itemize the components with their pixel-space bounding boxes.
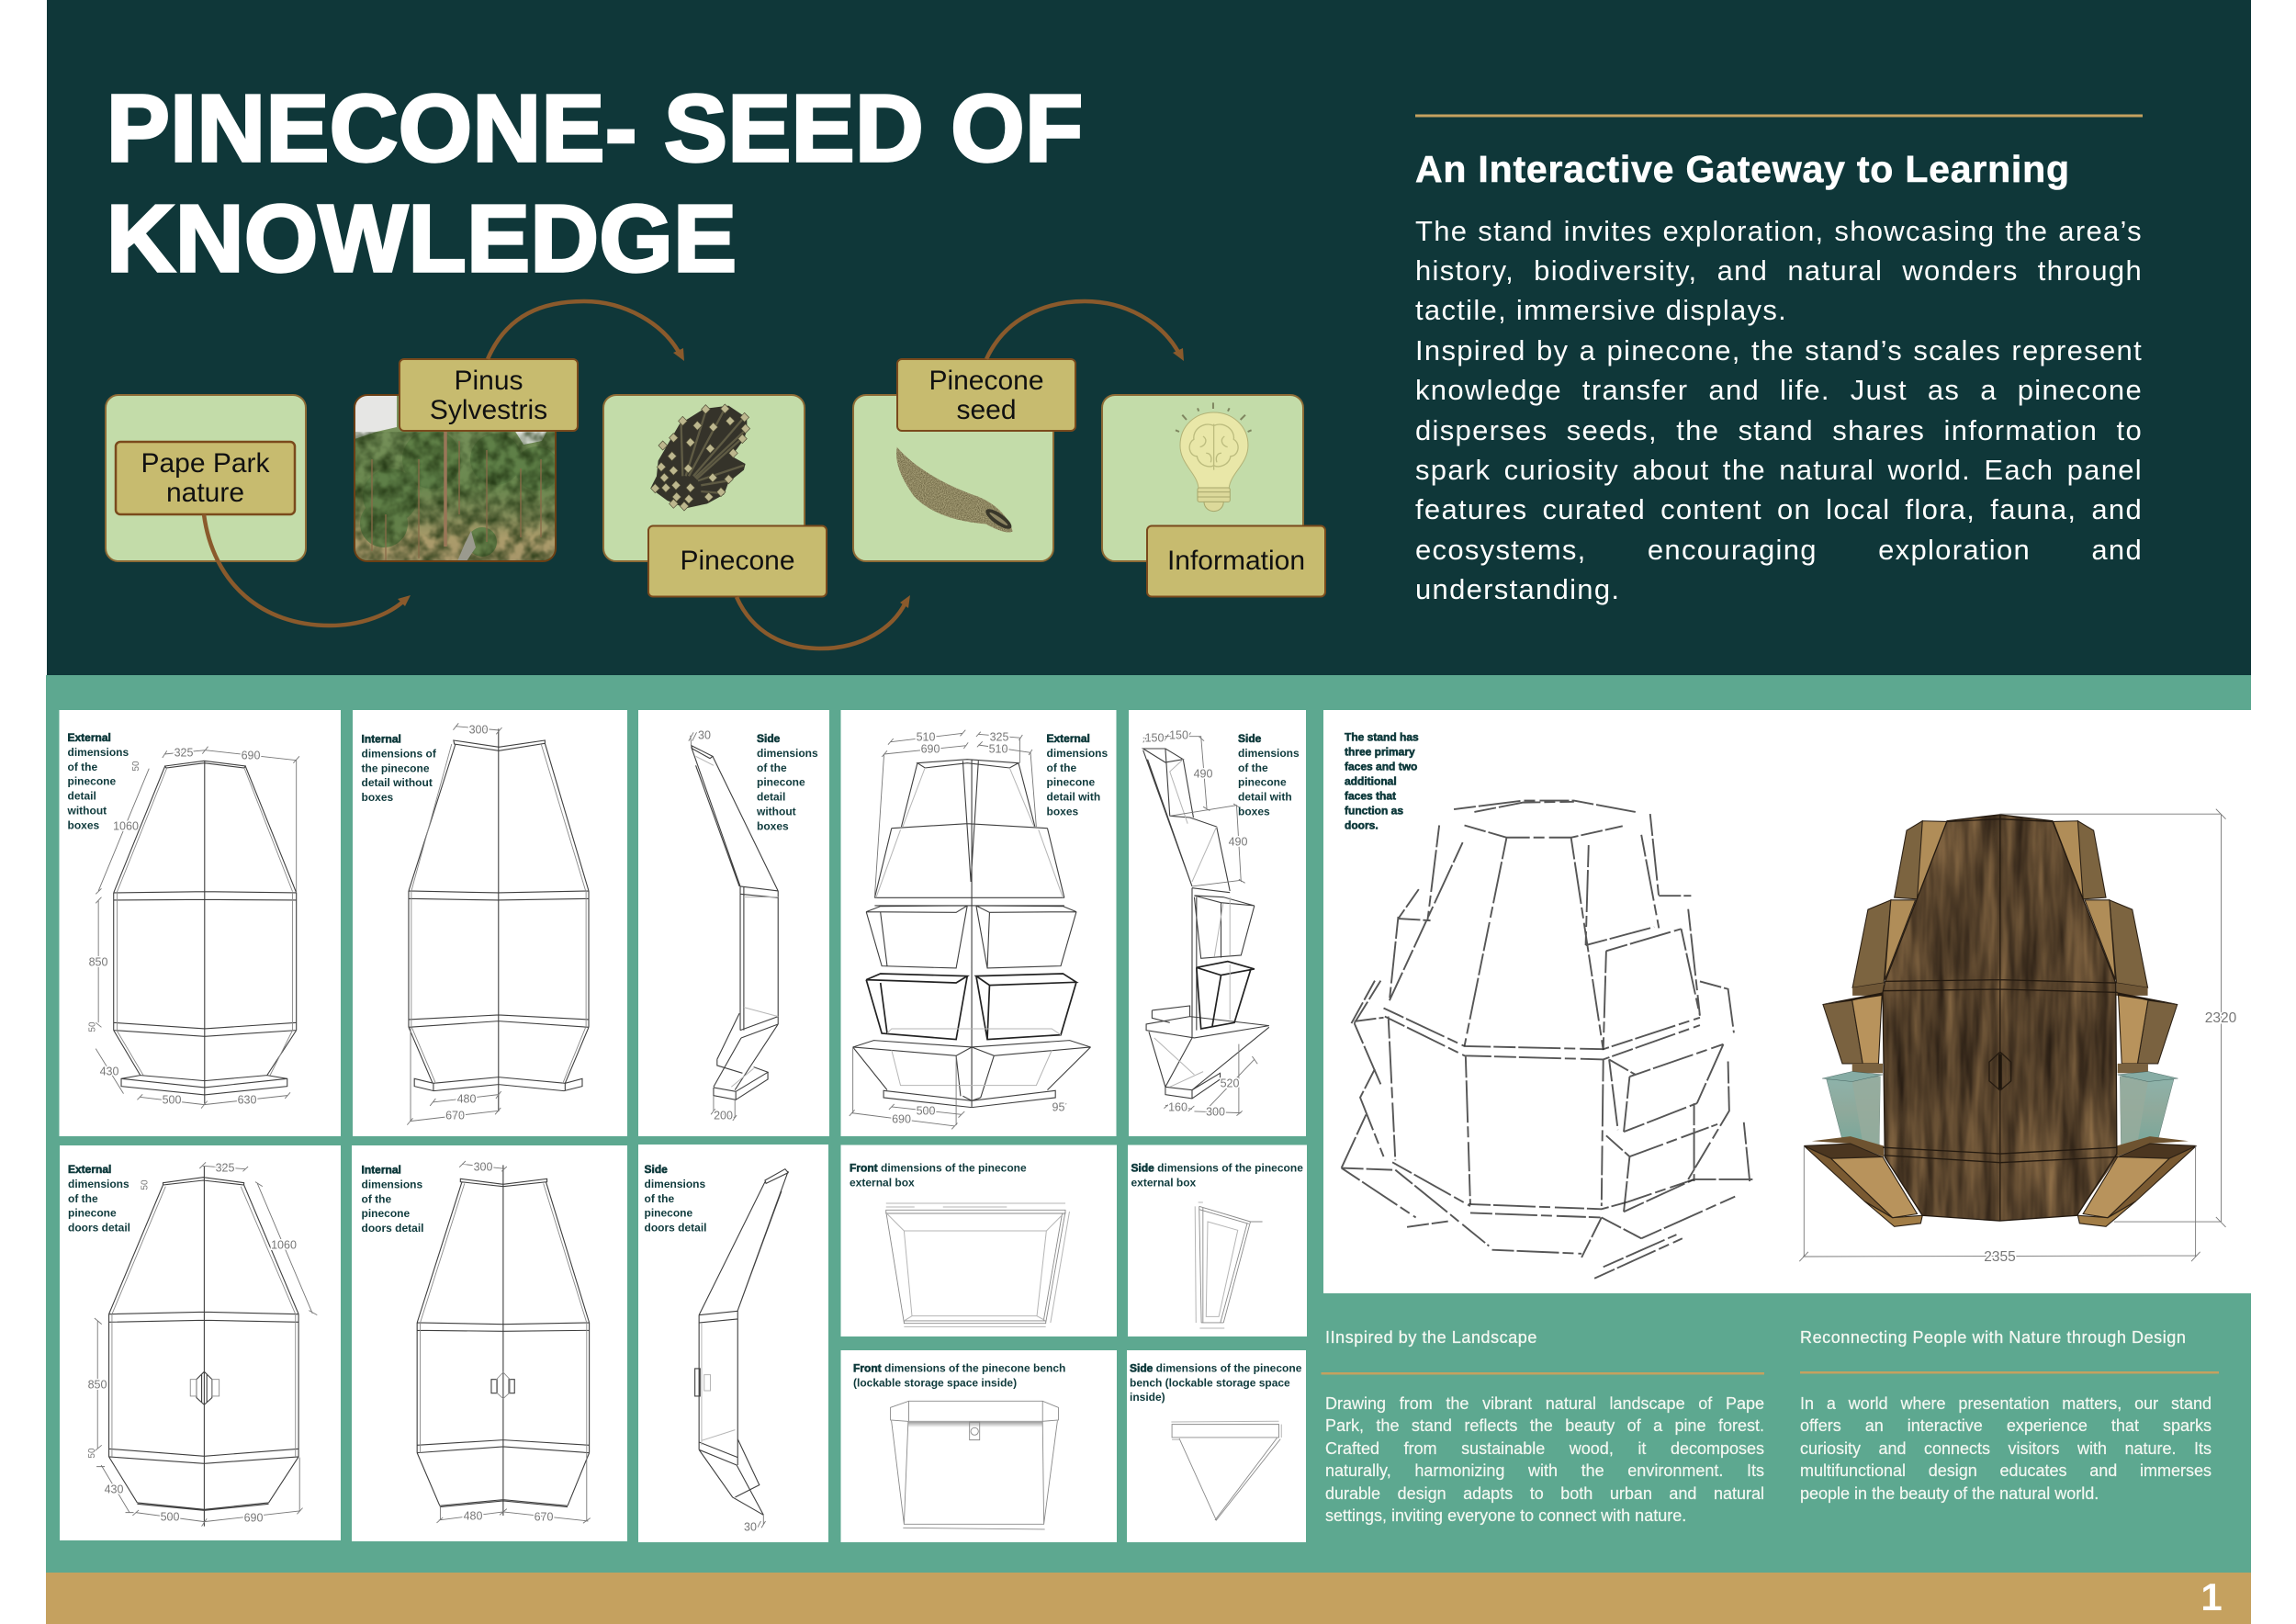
- drawing: internal doors: [417, 1161, 591, 1523]
- caption: function as: [1345, 805, 1403, 818]
- caption: boxes: [757, 819, 789, 832]
- icon: seed: [896, 447, 1014, 533]
- drawing: internal elevation: [407, 723, 589, 1125]
- left side boxes: [1804, 821, 1947, 1226]
- arrow: nature to forest: [204, 514, 411, 626]
- caption: external box: [1131, 1176, 1197, 1189]
- caption: doors detail: [645, 1222, 707, 1235]
- caption: the pinecone: [362, 761, 430, 774]
- panel: front external box: [841, 1145, 1117, 1336]
- dimension labels: 670: [535, 1510, 553, 1523]
- card: pinecone seed: [853, 359, 1075, 561]
- caption: dimensions of the pinecone bench: [882, 1361, 1065, 1374]
- title: KNOWLEDGE: [107, 186, 737, 291]
- footer bar: [46, 1573, 2251, 1624]
- main wooden body: [1883, 815, 2118, 1221]
- dimension labels: 690: [242, 749, 260, 761]
- body text: landscape: settings, inviting everyone to connect with nature.: [1325, 1506, 1686, 1525]
- header rule: [1415, 114, 2143, 118]
- body text: stand description: understanding.: [1415, 573, 1620, 605]
- title: [107, 75, 1083, 291]
- flow diagram: pinecone to information: [106, 301, 1325, 648]
- dimension labels: 1060: [271, 1238, 297, 1251]
- panel: side doors detail: [638, 1145, 828, 1542]
- caption: pinecone: [68, 775, 117, 788]
- caption: Internal: [362, 733, 401, 746]
- dimension labels: 95: [1052, 1100, 1064, 1113]
- drawing: external with boxes: [850, 730, 1090, 1129]
- caption: External: [1047, 732, 1090, 745]
- dimension labels: 325: [990, 730, 1008, 743]
- caption: Side: [757, 732, 781, 745]
- caption: boxes: [362, 791, 394, 804]
- card: forest photo, Pinus Sylvestris: Pinus: [454, 366, 523, 396]
- caption: pinecone: [68, 1207, 117, 1220]
- page number: 1: [2200, 1575, 2223, 1618]
- caption: The stand has: [1345, 731, 1419, 744]
- dimension labels: 50: [88, 1021, 98, 1032]
- caption: pinecone: [757, 776, 805, 789]
- drawing: side box: [1195, 1202, 1263, 1328]
- caption: doors detail: [68, 1222, 130, 1235]
- caption: detail: [68, 790, 96, 803]
- body text: stand description: The stand invites exploration, showcasing the area’s: [1415, 215, 2143, 246]
- dimension labels: [445, 723, 488, 1122]
- panel: external doors detail: [60, 1145, 341, 1540]
- panel: external dimensions without boxes: [59, 710, 341, 1136]
- drawing: side view: [689, 732, 778, 1121]
- title: PINECONE- SEED OF: [107, 75, 1083, 181]
- card: pinecone: [603, 395, 827, 597]
- panel: side bench: [1127, 1350, 1306, 1542]
- drawing: front bench: [891, 1401, 1058, 1529]
- caption: Side: [1130, 1361, 1154, 1374]
- body text: reconnecting: curiosity and connects visitors with nature. Its: [1800, 1439, 2212, 1458]
- caption: detail: [757, 791, 785, 804]
- dimension labels: 850: [89, 955, 107, 968]
- dimension labels: 50: [141, 1179, 151, 1190]
- dimension label: 30: [744, 1520, 757, 1533]
- panel: side dimensions without boxes: [638, 710, 829, 1136]
- body text: stand description: disperses seeds, the stand shares information to: [1415, 414, 2143, 446]
- drawing: external doors: [95, 1162, 317, 1527]
- body text: landscape: [1325, 1394, 1764, 1525]
- caption: boxes: [1238, 805, 1270, 818]
- dimension labels: 430: [105, 1483, 123, 1495]
- dimension labels: 480: [464, 1509, 482, 1522]
- dimension labels: [1984, 1010, 2237, 1265]
- body text: stand description: features curated content on local flora, fauna, and: [1415, 493, 2143, 525]
- caption: doors.: [1345, 819, 1379, 832]
- body text: stand description: tactile, immersive displays.: [1415, 294, 1787, 326]
- dimension labels: 510: [917, 730, 935, 743]
- caption: detail with: [1238, 791, 1292, 804]
- caption: dimensions: [68, 746, 129, 759]
- panel: internal dimensions without boxes: [353, 710, 627, 1136]
- caption: Side: [1238, 732, 1262, 745]
- dimension labels: 160: [1168, 1100, 1187, 1113]
- caption: pinecone: [1047, 776, 1096, 789]
- body text: landscape: Crafted from sustainable wood, it decomposes: [1325, 1439, 1764, 1458]
- card: forest photo, Pinus Sylvestris: Sylvestris: [430, 395, 547, 425]
- dimension labels: 325: [216, 1161, 234, 1174]
- drawing: side with boxes: [1143, 732, 1269, 1116]
- panel: side external box: [1128, 1145, 1307, 1336]
- caption: pinecone: [1238, 776, 1287, 789]
- body text: landscape: Park, the stand reflects the beauty of a pine forest.: [1325, 1416, 1764, 1435]
- caption: Front: [850, 1161, 878, 1174]
- caption: of the: [362, 1192, 391, 1205]
- caption: detail without: [362, 776, 433, 789]
- dimension labels: 430: [100, 1065, 118, 1077]
- caption: dimensions: [757, 747, 818, 760]
- text rule left: [1321, 1372, 1764, 1374]
- body text: stand description: history, biodiversity, and natural wonders through: [1415, 254, 2143, 287]
- dimension labels: 490: [1194, 767, 1212, 780]
- dimension labels: 150: [1145, 731, 1164, 744]
- panel: front bench: [841, 1350, 1117, 1542]
- card: information: Information: [1167, 546, 1305, 576]
- body text: stand description: knowledge transfer and life. Just as a pinecone: [1415, 374, 2143, 406]
- caption: external box: [850, 1176, 915, 1189]
- panel: side dimensions with boxes: [1129, 710, 1306, 1136]
- icon: pinecone: [650, 404, 750, 511]
- arrow: pinecone to seed: [737, 595, 910, 648]
- dimension labels: 850: [88, 1378, 107, 1391]
- caption: of the: [645, 1192, 674, 1205]
- caption: Front: [853, 1361, 882, 1374]
- caption: dimensions of: [362, 747, 437, 760]
- body text: stand description: ecosystems, encouraging exploration and: [1415, 534, 2143, 566]
- dimension labels: 2320: [2205, 1010, 2237, 1026]
- text rule right: [1800, 1371, 2219, 1374]
- dimension labels: [464, 1160, 553, 1523]
- dimension labels: 690: [921, 742, 940, 755]
- subheading: reconnecting people: Reconnecting People with Nature through Design: [1800, 1328, 2186, 1347]
- body text: landscape: durable design adapts to both urban and natural: [1325, 1484, 1764, 1503]
- panel: internal doors detail: [352, 1145, 627, 1541]
- heading: An Interactive Gateway to Learning: An Interactive Gateway to Learning: [1415, 148, 2069, 190]
- dimension labels: 30: [698, 728, 711, 741]
- caption: External: [68, 1163, 111, 1176]
- dimension labels: 200: [714, 1109, 733, 1122]
- dimension labels: [87, 1161, 297, 1524]
- dimension labels: 325: [174, 746, 193, 759]
- caption: dimensions of the pinecone: [878, 1161, 1027, 1174]
- caption: faces and two: [1345, 761, 1417, 773]
- card: forest photo, Pinus Sylvestris: [355, 359, 578, 561]
- dimension labels: 490: [1229, 835, 1247, 848]
- caption: dimensions of the pinecone: [1153, 1361, 1302, 1374]
- dimension labels: 500: [917, 1104, 935, 1117]
- caption: dimensions: [1047, 747, 1109, 760]
- caption: without: [66, 805, 107, 818]
- body text: landscape: Drawing from the vibrant natural landscape of Pape: [1325, 1394, 1764, 1413]
- arrow: seed to information: [986, 301, 1184, 361]
- dimension labels: 50: [131, 761, 141, 772]
- card: information: [1102, 395, 1325, 597]
- caption: faces that: [1345, 790, 1396, 803]
- dimension labels: [88, 746, 260, 1106]
- body text: reconnecting: multifunctional design educates and immerses: [1800, 1461, 2212, 1480]
- caption: dimensions of the pinecone: [1154, 1161, 1303, 1174]
- caption: of the: [757, 761, 787, 774]
- dimension labels: 50: [87, 1448, 97, 1459]
- caption: additional: [1345, 775, 1397, 788]
- caption: dimensions: [68, 1178, 129, 1190]
- card: Pape Park nature: [106, 395, 306, 561]
- body text: reconnecting: [1800, 1394, 2212, 1503]
- dimension labels: 500: [163, 1093, 181, 1106]
- dimension labels: 690: [244, 1511, 263, 1524]
- caption: detail with: [1047, 791, 1100, 804]
- caption: Side: [1131, 1161, 1154, 1174]
- caption: Internal: [362, 1163, 401, 1176]
- caption: boxes: [68, 818, 100, 831]
- dimension labels: 150: [1169, 728, 1188, 741]
- drawing: side bench: [1171, 1421, 1281, 1520]
- body text: reconnecting: offers an interactive experience that sparks: [1800, 1416, 2212, 1435]
- caption: inside): [1130, 1391, 1165, 1404]
- dimension labels: 2355: [1984, 1249, 2016, 1265]
- subheading: inspired by the landscape: IInspired by the Landscape: [1325, 1328, 1537, 1347]
- dimension labels: 630: [238, 1093, 256, 1106]
- icon: light bulb with brain: [1176, 402, 1252, 512]
- caption: without: [756, 805, 796, 818]
- body text: landscape: naturally, harmonizing with the environment. Its: [1325, 1461, 1764, 1480]
- dimension labels: [698, 728, 733, 1122]
- card: pinecone seed: seed: [956, 395, 1017, 425]
- dimension lines: [1799, 809, 2226, 1261]
- body text: reconnecting: people in the beauty of the natural world.: [1800, 1484, 2099, 1503]
- card: pinecone seed: Pinecone: [929, 366, 1044, 396]
- dimension labels: 520: [1221, 1077, 1239, 1089]
- caption: External: [68, 731, 111, 744]
- dimension labels: 480: [457, 1092, 476, 1105]
- render: wooden stand: [1799, 809, 2226, 1261]
- caption: boxes: [1047, 805, 1079, 818]
- caption: pinecone: [645, 1207, 693, 1220]
- caption: bench (lockable storage space: [1130, 1376, 1290, 1389]
- drawing: external elevation: [96, 747, 299, 1109]
- panel: dark header background: [47, 0, 2251, 675]
- caption: doors detail: [362, 1222, 424, 1235]
- dimension labels: 300: [474, 1160, 492, 1173]
- dimension labels: 690: [892, 1112, 911, 1125]
- caption: of the: [68, 761, 97, 773]
- right side boxes (mirrored): [2054, 821, 2196, 1226]
- dimension labels: 500: [161, 1510, 179, 1523]
- body text: stand description: [1415, 215, 2143, 605]
- dimension labels: 510: [989, 742, 1007, 755]
- dimension labels: [1145, 728, 1247, 1118]
- caption: dimensions: [645, 1178, 706, 1190]
- drawing: front box: [886, 1203, 1069, 1326]
- body text: reconnecting: In a world where presentation matters, our stand: [1800, 1394, 2212, 1413]
- caption: dimensions: [1238, 747, 1300, 760]
- caption: (lockable storage space inside): [853, 1376, 1017, 1389]
- body edges and door handle: [1883, 815, 2118, 1221]
- dimension labels: 300: [469, 723, 488, 736]
- caption: dimensions: [362, 1178, 423, 1190]
- card: Pape Park nature: nature: [166, 478, 244, 508]
- body text: stand description: Inspired by a pinecone, the stand’s scales represent: [1415, 334, 2143, 367]
- dimension labels: 300: [1206, 1105, 1225, 1118]
- card: pinecone: Pinecone: [680, 546, 795, 576]
- drawing: side doors: [695, 1169, 788, 1528]
- sketch: wireframe stand: [1342, 801, 1752, 1279]
- dimension labels: 670: [445, 1109, 465, 1122]
- caption: pinecone: [362, 1207, 411, 1220]
- panel: external dimensions with boxes: [841, 710, 1117, 1136]
- caption: of the: [1238, 761, 1268, 774]
- panel: stand overview: [1323, 710, 2251, 1293]
- arrow: forest to pinecone: [488, 301, 684, 361]
- dimension labels: [892, 730, 1064, 1125]
- panel: green drawings background: [46, 675, 2251, 1573]
- caption: of the: [68, 1192, 98, 1205]
- caption: three primary: [1345, 746, 1415, 759]
- caption: of the: [1047, 761, 1076, 774]
- body text: stand description: spark curiosity about the natural world. Each panel: [1415, 454, 2143, 486]
- caption: Side: [645, 1163, 668, 1176]
- card: Pape Park nature: Pape Park: [141, 448, 271, 479]
- dimension labels: 1060: [113, 819, 139, 832]
